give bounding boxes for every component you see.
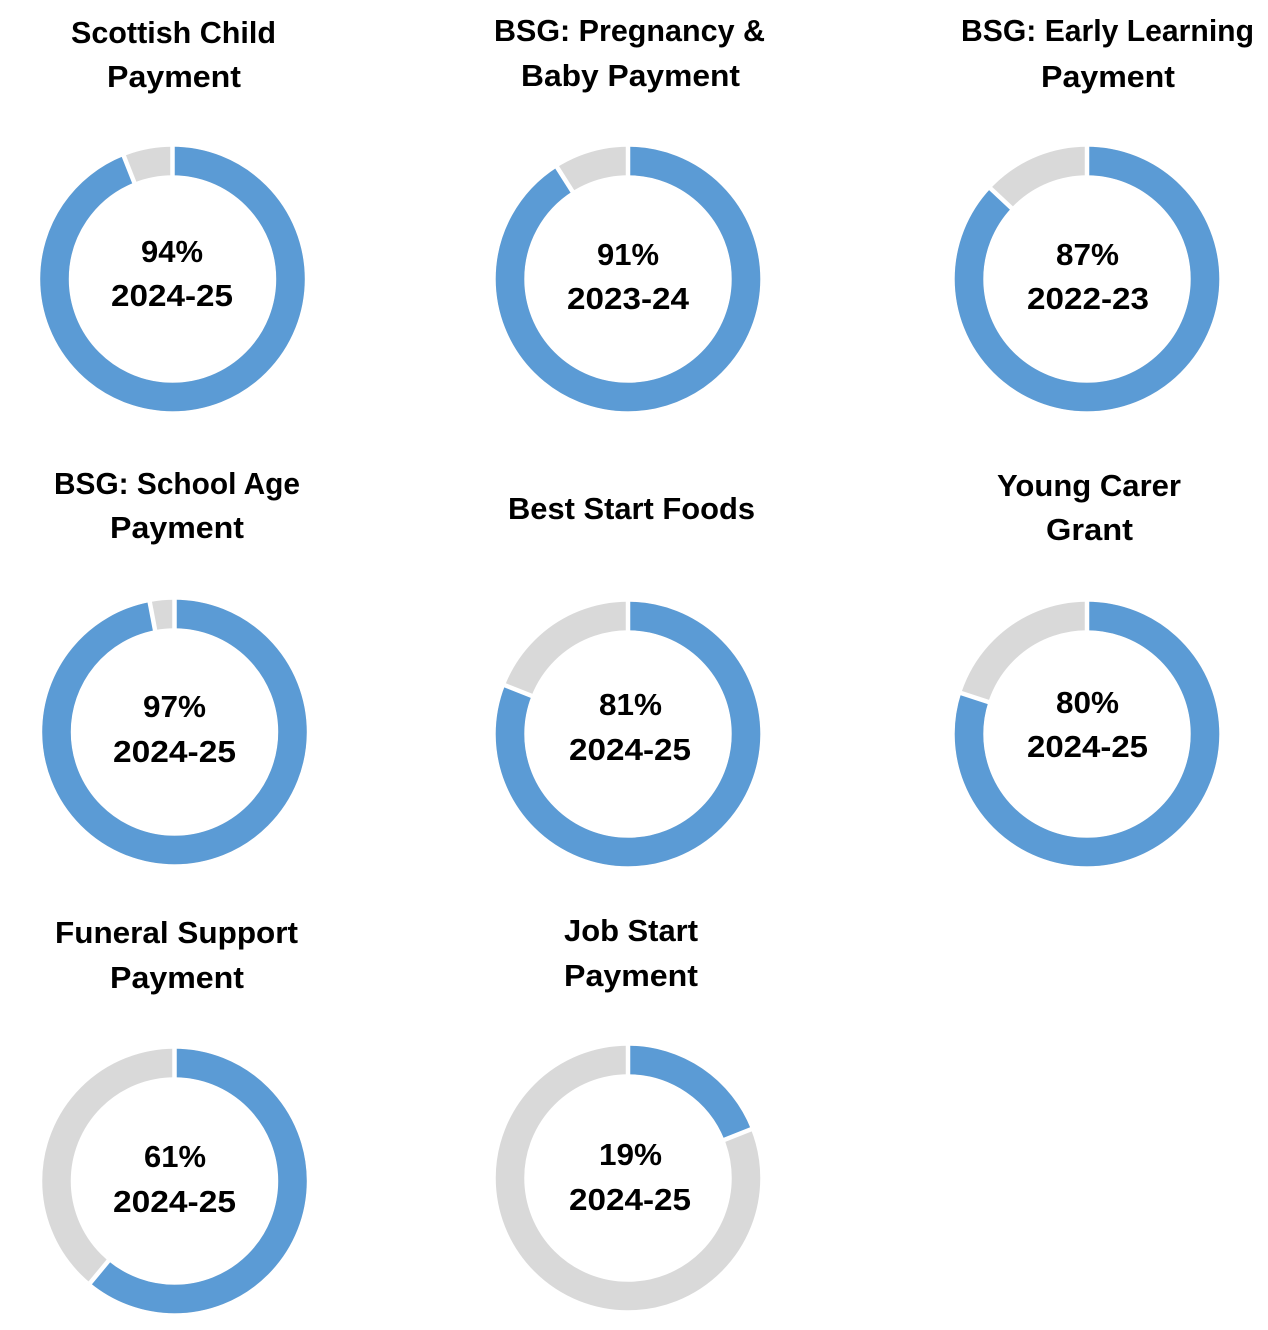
donut chart: 61% xyxy=(56,1042,292,1299)
heading: Scottish Child Payment: Payment xyxy=(107,59,241,94)
heading: Best Start Foods: Best Start Foods xyxy=(508,491,755,526)
heading: BSG Early Learning Payment: Payment xyxy=(1041,59,1175,94)
value label: 80% 2024-25: 80% xyxy=(1056,685,1119,720)
value label: 91% 2023-24: 2023-24 xyxy=(567,281,690,316)
value label: 19% 2024-25: 19% xyxy=(599,1137,662,1172)
value label: 81% 2024-25: 81% xyxy=(599,687,662,722)
value label: 80% 2024-25: 2024-25 xyxy=(1027,729,1148,764)
value label: 19% 2024-25: 2024-25 xyxy=(569,1182,691,1217)
heading: BSG Pregnancy and Baby Payment xyxy=(494,13,765,93)
value label: 61% 2024-25 xyxy=(113,1139,236,1219)
heading: Funeral Support Payment xyxy=(55,915,298,995)
panel: BSG School Age Payment xyxy=(54,466,300,850)
heading: Young Carer Grant: Young Carer xyxy=(997,468,1181,503)
heading: Scottish Child Payment: Scottish Child xyxy=(71,15,276,50)
heading: Job Start Payment xyxy=(564,913,698,993)
heading: BSG Early Learning Payment xyxy=(961,13,1254,94)
value label: 61% 2024-25: 2024-25 xyxy=(113,1184,236,1219)
panel: Best Start Foods xyxy=(499,491,755,852)
panel: Funeral Support Payment xyxy=(55,915,298,1299)
donut chart: 87% xyxy=(969,140,1205,397)
heading: BSG School Age Payment: BSG: School Age xyxy=(54,466,300,501)
value label: 94% 2024-25: 94% xyxy=(141,234,203,269)
panel: BSG Early Learning Payment xyxy=(961,13,1254,397)
value label: 97% 2024-25: 2024-25 xyxy=(113,734,236,769)
value label: 81% 2024-25: 2024-25 xyxy=(569,732,691,767)
donut chart: 91% xyxy=(510,140,746,397)
heading: BSG School Age Payment: Payment xyxy=(110,510,244,545)
value label: 61% 2024-25: 61% xyxy=(144,1139,206,1174)
value label: 97% 2024-25: 97% xyxy=(143,689,206,724)
value label: 91% 2023-24: 91% xyxy=(597,237,659,272)
heading: Funeral Support Payment: Funeral Support xyxy=(55,915,298,950)
donut chart: 81% xyxy=(499,595,746,852)
heading: Job Start Payment: Payment xyxy=(564,958,698,993)
value label: 94% 2024-25: 2024-25 xyxy=(111,278,233,313)
heading: Young Carer Grant: Grant xyxy=(1046,512,1133,547)
donut chart: 97% xyxy=(56,593,292,850)
value label: 80% 2024-25 xyxy=(1027,685,1148,764)
panel: Job Start Payment xyxy=(510,913,757,1296)
value label: 87% 2022-23: 87% xyxy=(1056,237,1119,272)
panel: BSG Pregnancy and Baby Payment xyxy=(494,13,765,397)
value label: 97% 2024-25 xyxy=(113,689,236,769)
panel: Scottish Child Payment xyxy=(54,15,290,397)
value label: 87% 2022-23 xyxy=(1027,237,1149,316)
panel: Young Carer Grant xyxy=(955,468,1205,852)
heading: BSG Pregnancy and Baby Payment: BSG: Pregnancy & xyxy=(494,13,765,48)
donut chart: 19% xyxy=(510,1039,757,1296)
heading: Young Carer Grant xyxy=(997,468,1181,547)
value label: 94% 2024-25 xyxy=(111,234,233,313)
donut chart: 94% xyxy=(54,140,290,397)
donut chart: 80% xyxy=(955,595,1205,852)
heading: BSG Pregnancy and Baby Payment: Baby Payment xyxy=(521,58,740,93)
heading: Funeral Support Payment: Payment xyxy=(110,960,244,995)
value label: 91% 2023-24 xyxy=(567,237,690,316)
value label: 81% 2024-25 xyxy=(569,687,691,767)
heading: BSG School Age Payment xyxy=(54,466,300,545)
heading: Scottish Child Payment xyxy=(71,15,276,94)
value label: 87% 2022-23: 2022-23 xyxy=(1027,281,1149,316)
heading: BSG Early Learning Payment: BSG: Early Learning xyxy=(961,13,1254,48)
heading: Job Start Payment: Job Start xyxy=(564,913,698,948)
value label: 19% 2024-25 xyxy=(569,1137,691,1217)
